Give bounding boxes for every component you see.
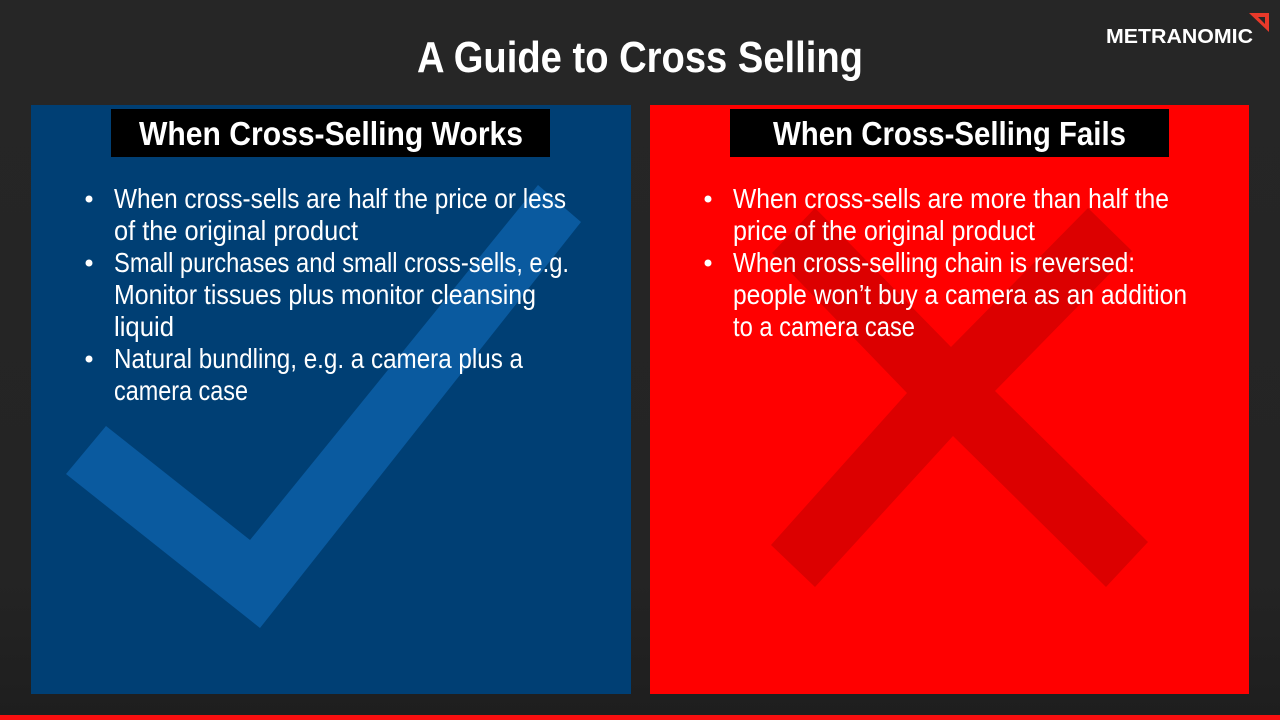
icon: check mark watermark bbox=[66, 185, 581, 628]
bullet list: works: of the original product bbox=[114, 215, 358, 246]
bullet list: works: Monitor tissues plus monitor cleansing bbox=[114, 279, 536, 310]
bullet list: works: camera case bbox=[114, 375, 248, 406]
panel: when cross-selling works bbox=[31, 105, 631, 694]
heading: fails: When Cross-Selling Fails bbox=[773, 115, 1126, 152]
panel background bbox=[650, 105, 1249, 694]
heading: fails bbox=[730, 109, 1169, 157]
bullet list: fails: people won’t buy a camera as an addition bbox=[733, 279, 1187, 310]
icon: cross watermark bbox=[771, 208, 1148, 587]
bullet list: works: Natural bundling, e.g. a camera plus a bbox=[114, 343, 524, 374]
bullet list: fails: to a camera case bbox=[733, 311, 915, 342]
logo triangle mark bbox=[1249, 13, 1269, 32]
bullet list: works: liquid bbox=[114, 311, 174, 342]
heading: works: When Cross-Selling Works bbox=[139, 115, 523, 152]
bullet list: fails: When cross-selling chain is reversed: bbox=[733, 247, 1135, 278]
bullet list: fails: When cross-sells are more than half the bbox=[733, 183, 1169, 214]
bullet list: works: Small purchases and small cross-sells, e.g. bbox=[114, 247, 569, 278]
bullet list: fails: price of the original product bbox=[733, 215, 1035, 246]
bottom red bar bbox=[0, 715, 1280, 720]
panel: when cross-selling fails bbox=[650, 105, 1249, 694]
title: A Guide to Cross Selling bbox=[417, 33, 863, 82]
logo: Metranomic bbox=[1106, 13, 1269, 48]
bullet list: works: When cross-sells are half the price or less bbox=[114, 183, 566, 214]
panel background bbox=[31, 105, 631, 694]
bullet list: works bbox=[86, 183, 569, 406]
bullet list: fails bbox=[704, 183, 1187, 342]
logo wordmark: METRANOMIC bbox=[1106, 26, 1253, 48]
